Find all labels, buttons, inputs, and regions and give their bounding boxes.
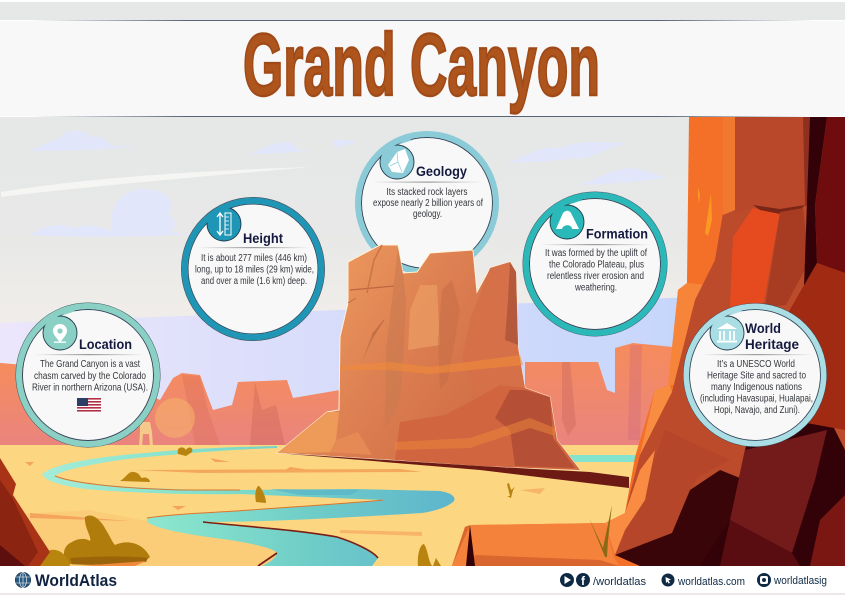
icon: globe	[16, 572, 30, 588]
panel: location	[16, 303, 160, 447]
icon: cursor	[662, 574, 674, 586]
icon: facebook: f	[581, 574, 586, 588]
central mesa	[277, 245, 629, 488]
background mesas left	[0, 363, 345, 450]
text: location: The Grand Canyon is a vast	[40, 359, 140, 370]
sand ground	[0, 445, 660, 566]
logo text: WorldAtlas	[35, 572, 117, 590]
panel: geology	[358, 134, 496, 272]
grass	[589, 505, 612, 557]
icon: temple	[686, 306, 824, 444]
heading: geology: Geology	[416, 164, 467, 179]
instagram handle: worldatlasig	[773, 575, 827, 587]
canyon scene	[0, 117, 845, 566]
heading: world heritage: Heritage	[745, 337, 799, 352]
social handle: /worldatlas	[593, 576, 647, 588]
text: formation: weathering.	[574, 282, 617, 294]
text: formation: relentless river erosion and	[547, 271, 644, 282]
text: location	[32, 359, 148, 394]
text: height: long, up to 18 miles (29 km) wide,	[195, 264, 314, 276]
title: Grand Canyon	[243, 15, 600, 114]
sky	[0, 117, 700, 460]
icon: US flag	[77, 398, 101, 413]
text: geology	[373, 187, 483, 220]
text: geology: expose nearly 2 billion years of	[373, 198, 483, 209]
background mesas right	[525, 343, 673, 450]
panel: height	[182, 198, 324, 340]
heading: height: Height	[243, 231, 283, 246]
text: geology: Its stacked rock layers	[386, 187, 468, 198]
website: worldatlas.com	[677, 576, 745, 588]
water tower	[139, 422, 153, 447]
heading: formation: Formation	[586, 226, 648, 242]
panel: formation	[523, 192, 667, 336]
right cliff	[452, 117, 845, 566]
text: location: River in northern Arizona (USA).	[32, 382, 148, 394]
icon: youtube	[560, 573, 574, 587]
icon: facebook	[576, 573, 590, 588]
header band	[0, 2, 845, 117]
text: location: chasm carved by the Colorado	[34, 371, 146, 382]
icon: ruler	[185, 201, 321, 337]
text: formation: It was formed by the uplift of	[545, 248, 647, 259]
text: world heritage: Heritage Site and sacred to	[707, 370, 806, 382]
text: height	[195, 253, 314, 287]
panel: world heritage	[684, 304, 826, 446]
icon: instagram	[757, 573, 771, 587]
text: formation	[545, 248, 647, 294]
icon: arch	[526, 195, 664, 333]
text: height: and over a mile (1.6 km) deep.	[201, 276, 307, 287]
text: formation: the Colorado Plateau, plus	[549, 260, 644, 270]
icon: rock	[380, 145, 414, 179]
heading: world heritage	[745, 321, 799, 352]
text: geology: geology.	[413, 209, 442, 220]
small bushes	[120, 447, 515, 566]
text: world heritage	[700, 359, 813, 416]
text: height: It is about 277 miles (446 km)	[201, 253, 307, 264]
icon: map pin	[19, 306, 157, 444]
heading: world heritage: World	[745, 321, 781, 336]
large bush	[22, 515, 150, 566]
text: world heritage: Hopi, Navajo, and Zuni).	[714, 405, 800, 416]
ring: geology	[358, 134, 496, 272]
text: world heritage: many Indigenous nations	[711, 382, 802, 393]
heading: location: Location	[79, 337, 132, 352]
footer	[0, 566, 845, 595]
river	[42, 446, 635, 566]
text: world heritage: (including Havasupai, Hualapai,	[700, 394, 813, 404]
text: world heritage: It’s a UNESCO World	[717, 359, 795, 370]
foreground rock left	[0, 458, 50, 566]
